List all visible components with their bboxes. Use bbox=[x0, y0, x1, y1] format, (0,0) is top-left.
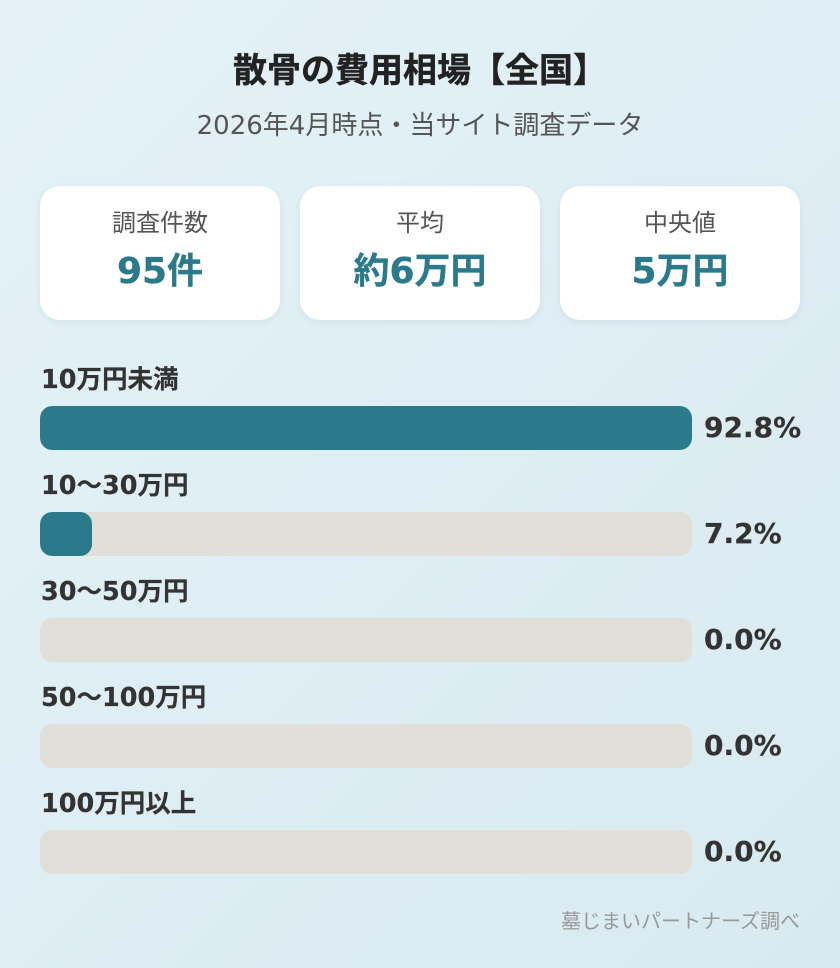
bar label: 10万円未満 bbox=[41, 365, 178, 395]
label: average: 平均 bbox=[396, 209, 444, 237]
bar row: 100k to 300k yen bbox=[40, 471, 782, 556]
bar row: over 1M yen bbox=[40, 789, 782, 874]
panel: average bbox=[300, 186, 540, 320]
bar track bbox=[40, 830, 692, 874]
bar value: 0.0% bbox=[704, 729, 782, 762]
value: average: 約6万円 bbox=[353, 251, 487, 292]
bar label: 100万円以上 bbox=[41, 789, 196, 819]
bar track bbox=[40, 724, 692, 768]
panel: survey count bbox=[40, 186, 280, 320]
source footer: 墓じまいパートナーズ調べ bbox=[561, 909, 800, 933]
bar row: 300k to 500k yen bbox=[40, 577, 782, 662]
bar label: 10～30万円 bbox=[41, 471, 188, 501]
bar label: 30～50万円 bbox=[41, 577, 188, 607]
bar value: 92.8% bbox=[704, 411, 801, 444]
panel: median bbox=[560, 186, 800, 320]
value: survey count: 95件 bbox=[117, 251, 203, 292]
label: median: 中央値 bbox=[644, 209, 716, 237]
value: median: 5万円 bbox=[631, 251, 729, 292]
subtitle: 2026年4月時点・当サイト調査データ bbox=[197, 111, 643, 141]
title: 散骨の費用相場【全国】 bbox=[233, 51, 607, 91]
bar value: 7.2% bbox=[704, 517, 782, 550]
bar value: 0.0% bbox=[704, 835, 782, 868]
bar track and fill bbox=[40, 512, 692, 556]
bar row: 500k to 1M yen bbox=[40, 683, 782, 768]
bar value: 0.0% bbox=[704, 623, 782, 656]
bar label: 50～100万円 bbox=[41, 683, 206, 713]
label: survey count: 調査件数 bbox=[112, 209, 208, 237]
bar track and fill bbox=[40, 406, 692, 450]
bar track bbox=[40, 618, 692, 662]
bar row: under 100k yen bbox=[40, 365, 801, 450]
